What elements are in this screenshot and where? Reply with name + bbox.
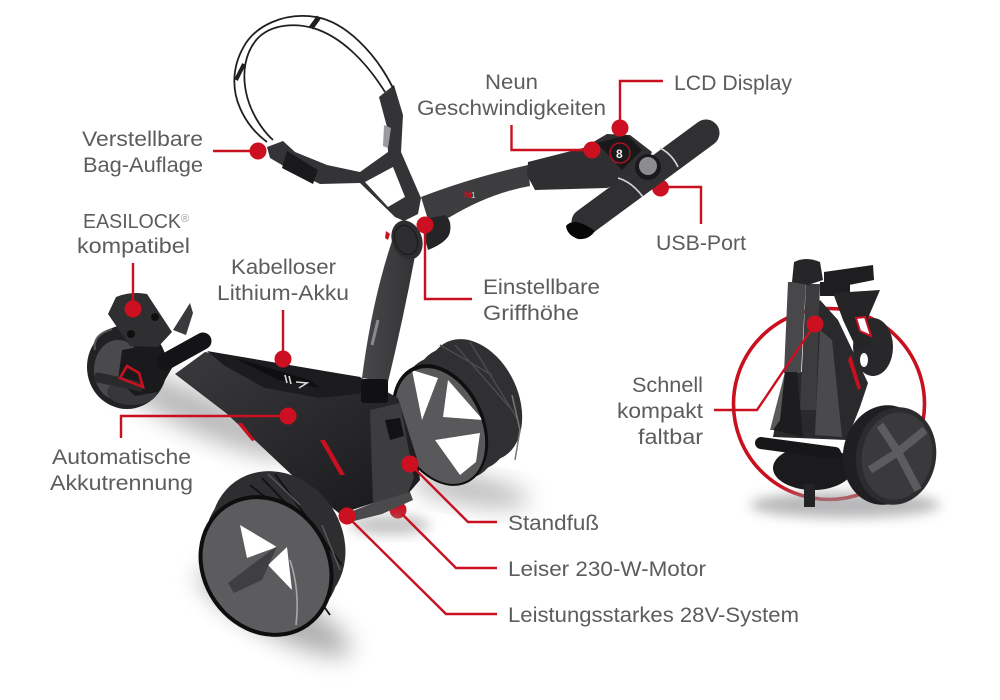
wheel mount bracket with red triangle — [94, 343, 172, 396]
back wheel — [773, 446, 853, 490]
folded trolley — [750, 259, 944, 518]
small rear wheel — [853, 318, 893, 376]
ground shadows — [110, 358, 532, 671]
speed knob — [635, 154, 661, 180]
callout: lcd display — [612, 72, 793, 136]
callout: schnell kompakt faltbar — [617, 316, 824, 449]
callout: verstellbare bag-auflage — [82, 128, 266, 177]
callout: easilock — [77, 211, 190, 318]
folded posts — [784, 282, 806, 373]
callout: easilock: ® — [181, 213, 189, 225]
callout: schnell kompakt faltbar: faltbar — [638, 426, 703, 449]
callout: einstellbare griffhoehe — [416, 216, 600, 325]
lcd display — [597, 135, 642, 170]
callout: verstellbare bag-auflage: Bag-Auflage — [83, 154, 203, 177]
leader dots hidden behind trolley parts — [390, 180, 669, 518]
callout: leiser motor — [402, 514, 706, 581]
easilock plate — [108, 293, 193, 347]
front folded wheel — [835, 398, 944, 512]
rear wheel — [393, 339, 522, 486]
callout: schnell kompakt faltbar: Schnell — [632, 374, 703, 397]
handle body and console: 8 — [616, 147, 623, 161]
height adjust hub — [385, 215, 450, 264]
top plates — [824, 265, 874, 290]
chassis body — [175, 351, 420, 522]
callout: 28v-system — [338, 508, 799, 627]
callout: usb-port — [656, 187, 746, 255]
bag holder frame — [267, 85, 421, 221]
callout: automatische akkutrennung — [50, 408, 296, 495]
callout: easilock: kompatibel — [77, 235, 190, 258]
callout: lcd display: LCD Display — [674, 72, 793, 95]
callout: verstellbare bag-auflage: Verstellbare — [82, 128, 203, 151]
callout: kabelloser lithium-akku: Kabelloser — [231, 256, 336, 279]
callout: kabelloser lithium-akku: Lithium-Akku — [217, 282, 349, 305]
callout: einstellbare griffhoehe: Griffhöhe — [483, 302, 579, 325]
callout: standfuss — [402, 456, 599, 535]
left caddy wheel — [87, 325, 167, 409]
callout: schnell kompakt faltbar: kompakt — [617, 400, 703, 423]
red circle behind folded trolley — [734, 308, 924, 500]
main trolley — [87, 16, 706, 671]
callout: standfuss: Standfuß — [508, 512, 599, 535]
post — [361, 238, 415, 403]
grip rings — [618, 148, 678, 197]
upper handle tube: 1 — [471, 191, 476, 200]
callout: 28v-system: Leistungsstarkes 28V-System — [508, 604, 799, 627]
upper handle tube — [421, 165, 530, 226]
callout: einstellbare griffhoehe: Einstellbare — [483, 276, 600, 299]
battery top — [207, 351, 366, 398]
front wheel — [171, 445, 373, 663]
callout: neun geschwindigkeiten: Geschwindigkeiten — [417, 97, 606, 120]
folded handle bar — [761, 443, 835, 453]
callout: automatische akkutrennung: Automatische — [52, 446, 191, 469]
callout: usb-port: USB-Port — [656, 232, 746, 255]
grey side panel — [370, 403, 414, 503]
callout: neun geschwindigkeiten: Neun — [485, 71, 538, 94]
callout: kabelloser lithium-akku — [217, 256, 349, 368]
callout: automatische akkutrennung: Akkutrennung — [50, 472, 193, 495]
bag ring — [234, 16, 393, 142]
red accents — [320, 440, 345, 475]
folded body — [773, 300, 868, 440]
front tube — [165, 341, 203, 362]
callout: easilock: EASILOCK — [83, 211, 182, 233]
foot — [804, 484, 815, 507]
upper handle tube: M — [464, 190, 472, 200]
handle body and console — [527, 133, 706, 239]
callout: leiser motor: Leiser 230-W-Motor — [508, 558, 706, 581]
folded shadow — [750, 492, 940, 518]
callout: neun geschwindigkeiten — [417, 71, 606, 158]
